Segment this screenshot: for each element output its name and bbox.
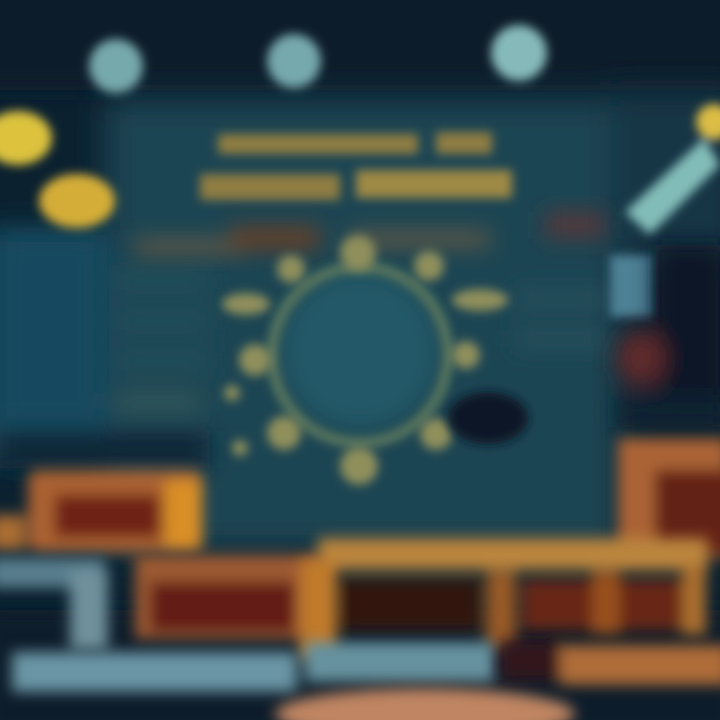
ceiling: [0, 0, 720, 90]
back wall: [0, 90, 720, 550]
icon: ceiling light right: [491, 25, 547, 81]
text block: blurred subtitle: [135, 212, 605, 254]
panel: left wall shelves: [0, 235, 605, 468]
furniture: lower dark base: [0, 610, 720, 720]
furniture: pale blue floor bench: [12, 642, 495, 692]
chart ring: [272, 267, 448, 443]
heading: blurred title: [200, 132, 512, 200]
dark figure near chart: [448, 392, 528, 444]
chart: radial gold ring: [222, 235, 508, 485]
icon: desk lamp arm: [610, 104, 720, 317]
icon: yellow lamp lower left: [39, 174, 115, 228]
person silhouette right: [616, 245, 720, 427]
furniture: bottom centre peach table: [275, 688, 575, 720]
furniture: long orange table: [300, 538, 708, 660]
furniture: bottom right orange step: [500, 640, 720, 685]
icon: ceiling light centre: [267, 34, 321, 88]
icon: yellow lamp upper left: [0, 111, 52, 165]
icon: ceiling light left: [89, 39, 143, 93]
furniture: right red cabinet: [618, 438, 720, 558]
furniture: pale blue desk left: [0, 558, 108, 650]
chart centre disc: [282, 272, 438, 428]
chart spokes and nodes: [222, 235, 508, 485]
furniture: left orange block: [0, 470, 203, 552]
furniture: centre left red bench: [135, 555, 325, 639]
